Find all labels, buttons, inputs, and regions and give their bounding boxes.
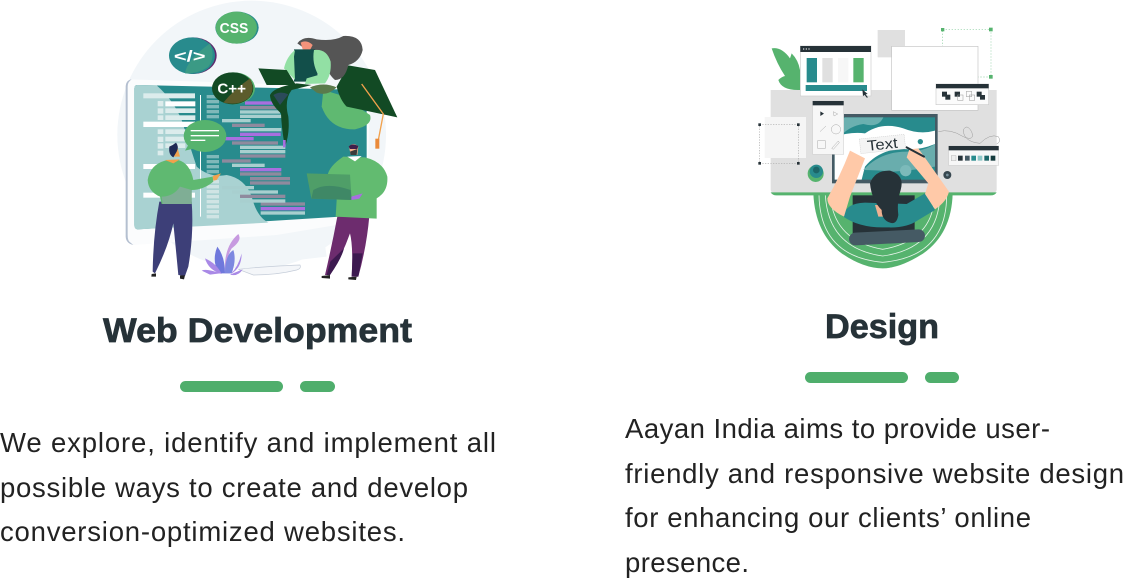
Text label: Text bbox=[866, 136, 899, 155]
bubble: CSS bbox=[215, 12, 259, 44]
bearded man with laptop bbox=[307, 144, 387, 280]
divider: left accent bbox=[180, 381, 335, 392]
bubble: code tag bbox=[169, 37, 217, 74]
desk edge bbox=[771, 192, 997, 195]
left blank panel bbox=[758, 117, 806, 165]
code lines bbox=[143, 93, 305, 218]
shapes toolbar bbox=[936, 84, 989, 105]
pen bbox=[907, 147, 924, 157]
text block: design: Aayan India aims to provide user- bbox=[625, 413, 1050, 444]
squiggle bbox=[938, 127, 1000, 144]
man pointing bbox=[148, 143, 221, 279]
pots and knob bbox=[808, 165, 951, 182]
grey square bbox=[878, 30, 905, 57]
selection frame bbox=[941, 28, 993, 79]
heading: Web Development: Web Development bbox=[103, 312, 412, 350]
text block: design: for enhancing our clients’ online bbox=[625, 502, 1031, 533]
graduation cap bbox=[322, 65, 397, 149]
plant bbox=[202, 234, 243, 275]
leaf bbox=[772, 48, 800, 90]
colour palette bbox=[949, 146, 999, 165]
background circle bbox=[117, 1, 386, 269]
speech bubble bbox=[184, 120, 226, 152]
Text label bbox=[859, 134, 906, 156]
illustration: design bbox=[758, 28, 1000, 268]
chart window bbox=[800, 46, 871, 98]
illustration: web development bbox=[117, 1, 397, 280]
screen bbox=[134, 85, 367, 229]
green semicircle bbox=[813, 193, 953, 268]
woman on laptop bbox=[258, 36, 363, 147]
white artboard bbox=[892, 46, 978, 110]
desk bbox=[771, 90, 997, 193]
bubble: CSS: CSS bbox=[220, 21, 249, 37]
text block: web development bbox=[0, 427, 496, 547]
bubble: C++ bbox=[212, 72, 255, 104]
monitor bbox=[832, 114, 938, 183]
text block: web development: possible ways to create and develop bbox=[0, 472, 468, 503]
text block: design: presence. bbox=[625, 547, 749, 578]
text block: design bbox=[625, 413, 1124, 578]
text block: web development: conversion-optimized websites. bbox=[0, 516, 405, 547]
woman designer bbox=[827, 148, 949, 227]
divider: right accent bbox=[805, 372, 959, 383]
heading: Design: Design bbox=[825, 308, 939, 346]
text block: design: friendly and responsive website design bbox=[625, 458, 1124, 489]
bubble: code tag: </> bbox=[174, 49, 205, 66]
chair bbox=[849, 195, 925, 246]
tools panel bbox=[813, 101, 844, 154]
bubble: C++: C++ bbox=[217, 82, 246, 98]
text block: web development: We explore, identify and implement all bbox=[0, 427, 496, 458]
monitor bbox=[126, 79, 370, 275]
